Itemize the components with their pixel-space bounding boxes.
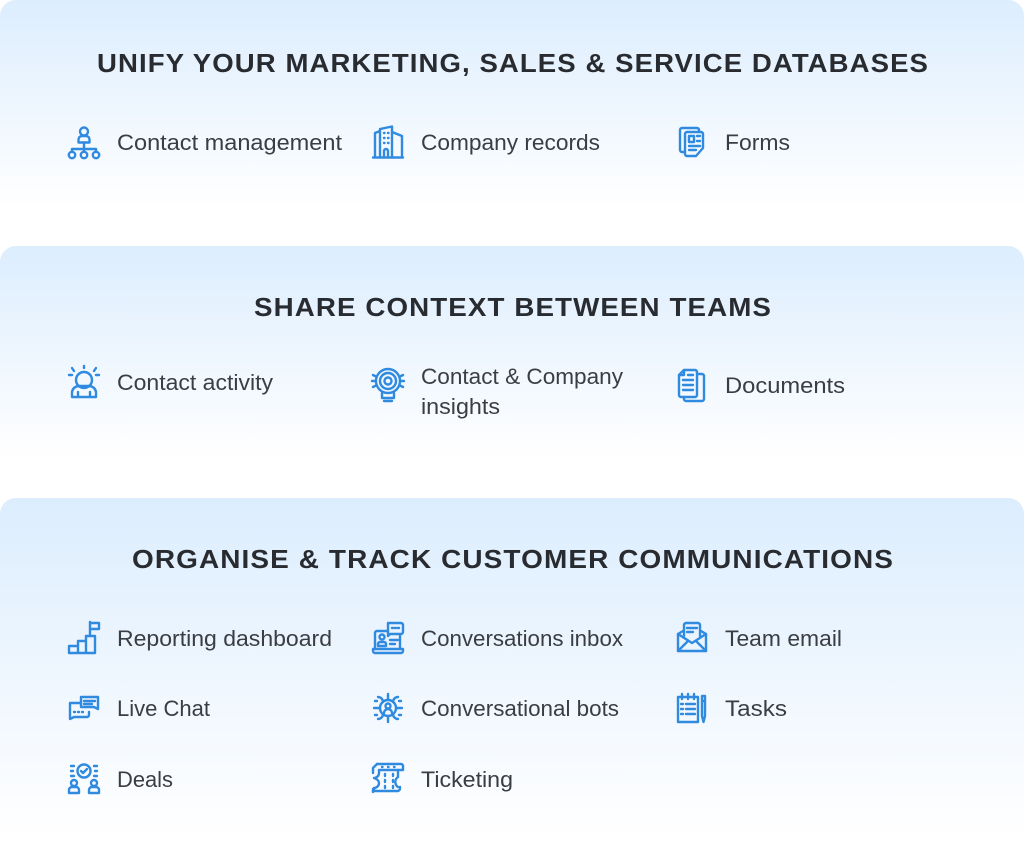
- label: documents: Documents: [725, 373, 845, 398]
- icon: documents: [679, 370, 704, 401]
- label: deals: Deals: [117, 767, 173, 792]
- icon: reporting dashboard: [69, 622, 99, 653]
- label: insights line two: insights: [421, 394, 500, 419]
- label: contact activity: Contact activity: [117, 370, 273, 395]
- label: contact management: Contact management: [117, 130, 342, 155]
- panel: organise and track: [0, 498, 1024, 848]
- panel: share context: [0, 246, 1024, 498]
- icon: live chat: [70, 697, 98, 719]
- icon: ticketing: [373, 764, 403, 792]
- label: tasks: Tasks: [725, 696, 787, 721]
- label: contact and company insights: Contact & Company: [421, 364, 623, 389]
- icon: tasks: [678, 694, 705, 722]
- label: live chat: Live Chat: [117, 696, 210, 721]
- icon: contact and company insights: [372, 369, 404, 401]
- label: conversations inbox: Conversations inbox: [421, 626, 623, 651]
- icon: conversational bots: [374, 694, 402, 722]
- label: team email: Team email: [725, 626, 842, 651]
- icon: contact management: [69, 128, 99, 158]
- label: ticketing: Ticketing: [421, 767, 513, 792]
- heading: organise and track: ORGANISE & TRACK CUSTOMER COMMUNICATIONS: [132, 546, 894, 574]
- label: forms: Forms: [725, 130, 790, 155]
- panel: unify databases: [0, 0, 1024, 246]
- heading: share context: SHARE CONTEXT BETWEEN TEAMS: [254, 294, 772, 322]
- icon: contact activity: [69, 366, 99, 397]
- label: company records: Company records: [421, 130, 600, 155]
- icon: deals: [69, 764, 99, 793]
- label: reporting dashboard: Reporting dashboard: [117, 626, 332, 651]
- label: conversational bots: Conversational bots: [421, 696, 619, 721]
- icon: conversations inbox: [373, 623, 403, 653]
- icon: team email: [678, 623, 706, 651]
- heading: unify databases: UNIFY YOUR MARKETING, SALES & SERVICE DATABASES: [97, 50, 929, 78]
- icon: forms: [680, 128, 703, 156]
- icon: company records: [373, 126, 403, 158]
